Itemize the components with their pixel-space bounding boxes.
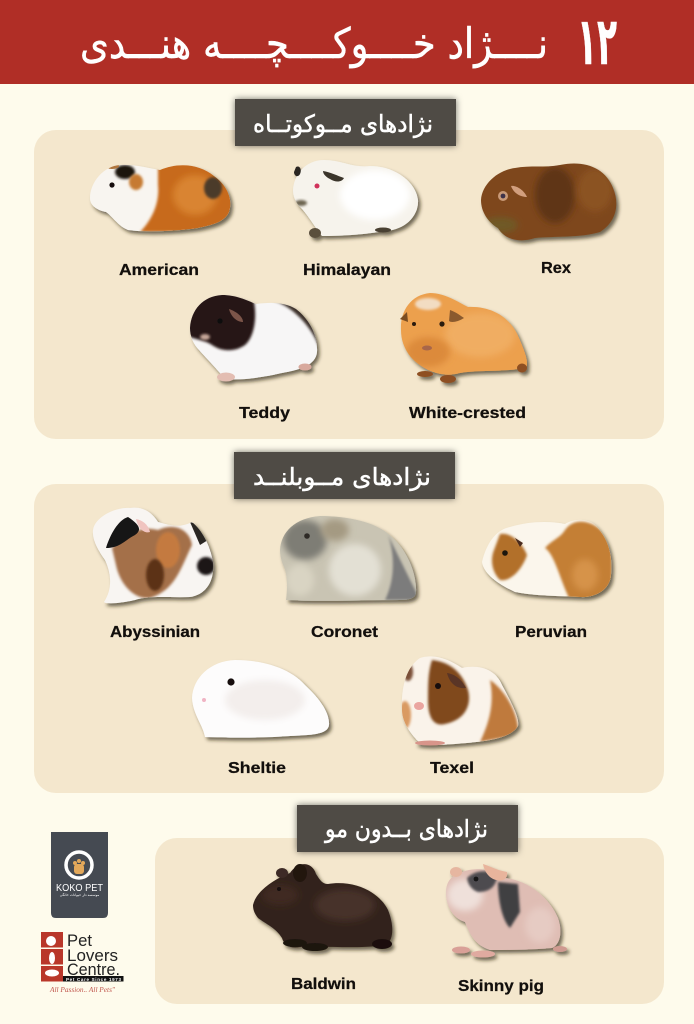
label: Abyssinian: Abyssinian [110,624,200,641]
logo: Pet Lovers Centre: Pet [67,932,92,950]
header band: ۱۲ [577,3,617,80]
breed: Texel [402,656,524,774]
icon: paw [73,859,85,874]
logo: Koko Pet [51,832,108,918]
breed: Abyssinian [88,503,218,641]
label: American: American [119,262,199,279]
breed: Rex [480,164,622,274]
label: Teddy: Teddy [239,405,290,422]
heading tab: hairless [297,805,518,852]
panel: hairless breeds [155,805,664,1004]
breed: Skinny pig [442,860,567,995]
label: Rex: Rex [541,260,571,277]
heading tab: long-haired: نژادهای مــوبلنــد [253,463,431,491]
title: نــــژاد خــــوکــــچــــه هنـــدی [80,19,548,68]
logo: Pet Lovers Centre [41,932,124,994]
breed: Teddy [186,290,325,422]
label: Coronet: Coronet [311,624,379,641]
label: Baldwin: Baldwin [291,976,356,993]
panel: short-haired breeds [34,99,664,439]
heading tab: hairless: نژادهای بــدون مو [324,815,488,843]
breed: White-crested [396,288,531,422]
label: Skinny pig: Skinny pig [458,978,544,995]
logo: Pet Lovers Centre: Pet Care Since 1973 [66,977,121,982]
label: Texel: Texel [430,760,474,777]
breed: Himalayan [290,155,425,279]
logo: Pet Lovers Centre: Centre. [67,961,120,979]
breed: Sheltie [188,656,334,777]
logo: Koko Pet: KOKO PET [56,883,103,894]
logo: Koko Pet: موسسه دار حیوانات خانگی [60,892,99,897]
label: White-crested: White-crested [409,405,526,422]
panel: long-haired breeds [34,452,664,793]
label: Peruvian: Peruvian [515,624,587,641]
breed: Coronet [276,512,421,641]
label: Himalayan: Himalayan [303,262,391,279]
breed: Peruvian [478,516,616,641]
breed: American [85,160,235,279]
label: Sheltie: Sheltie [228,760,286,777]
breed: Baldwin [250,858,396,993]
heading tab: short-haired [235,99,456,146]
logo: Pet Lovers Centre: All Passion.. All Pets" [49,986,115,994]
heading tab: long-haired [234,452,455,499]
header band [0,0,694,84]
logo: Pet Lovers Centre: Lovers [67,947,118,965]
heading tab: short-haired: نژادهای مــوکوتــاه [253,110,433,138]
